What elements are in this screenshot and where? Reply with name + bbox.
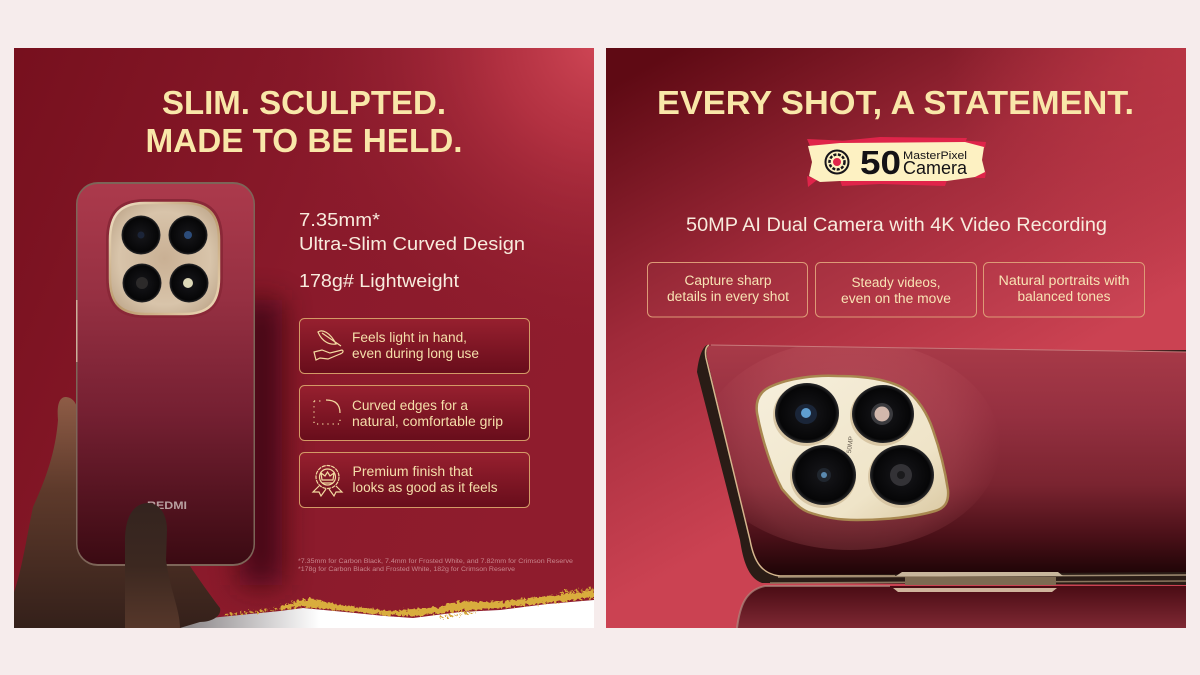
camera bump engraving: 50MP [846, 436, 855, 454]
feature text: Curved edges for a [352, 398, 468, 413]
thumb over phone [125, 503, 180, 628]
feature box: light in hand [300, 318, 530, 374]
icon: curved corner [314, 400, 340, 424]
50 MasterPixel Camera label [861, 150, 967, 174]
panel: camera [606, 48, 1186, 628]
feature text [667, 273, 789, 304]
brand logo: REDMI [147, 500, 187, 512]
panel: slim and sculpted design [14, 48, 594, 628]
phone close-up [697, 340, 1186, 592]
lens bottom left [122, 264, 162, 302]
feature box: curved edges [300, 386, 530, 440]
camera badge [807, 137, 986, 187]
lens top right [168, 216, 208, 254]
feature text: even during long use [352, 346, 479, 361]
footnotes [298, 558, 573, 573]
50 MasterPixel Camera label: 50 [860, 144, 901, 181]
title [148, 90, 460, 152]
footnotes: *7.35mm for Carbon Black, 7.4mm for Frosted White, and 7.82mm for Crimson Reserve [298, 558, 573, 565]
specs text: 178g# Lightweight [299, 270, 459, 291]
specs text [299, 209, 525, 291]
lens top right [850, 385, 914, 446]
phone reflection [737, 586, 1186, 628]
lens bottom left [790, 445, 856, 508]
lens bottom right [868, 445, 934, 508]
feature text: looks as good as it feels [352, 480, 498, 495]
lens top left [122, 216, 160, 254]
specs text: 7.35mm* [299, 209, 380, 230]
feature box: steady videos [816, 262, 976, 317]
lens top left [773, 383, 839, 446]
feature text: Capture sharp [684, 273, 772, 288]
phone side rail and buttons [770, 572, 1186, 592]
50 MasterPixel Camera label: Camera [903, 158, 968, 178]
feature text [352, 464, 498, 495]
camera bump [110, 203, 219, 314]
icon: feather over hand [314, 331, 343, 360]
feature text: details in every shot [667, 289, 789, 304]
subtitle: 50MP AI Dual Camera with 4K Video Recording [686, 215, 1107, 236]
lens bottom right flash [170, 264, 208, 302]
feature text: Feels light in hand, [352, 330, 467, 345]
50 MasterPixel Camera label: MasterPixel [903, 150, 967, 162]
specs text: Ultra-Slim Curved Design [299, 233, 525, 254]
feature box: premium finish [300, 452, 530, 508]
title: SLIM. SCULPTED. [162, 84, 446, 121]
feature text [352, 330, 479, 361]
icon: camera aperture [826, 150, 848, 174]
feature text: Natural portraits with [998, 273, 1130, 288]
feature text: balanced tones [1018, 289, 1111, 304]
feature text: Premium finish that [352, 464, 473, 479]
feature text: even on the move [841, 291, 951, 306]
title: EVERY SHOT, A STATEMENT. [657, 84, 1134, 121]
title: MADE TO BE HELD. [146, 122, 462, 159]
feature text: natural, comfortable grip [352, 414, 503, 429]
panel background [14, 48, 594, 628]
feature text [842, 277, 950, 303]
feature box: sharp details [648, 262, 808, 317]
camera bump [757, 376, 948, 520]
torn white and gold paper edge [180, 589, 594, 628]
icon: premium badge [313, 466, 342, 496]
feature box: natural portraits [984, 262, 1144, 317]
hand behind phone [14, 397, 220, 628]
feature text [1000, 275, 1129, 301]
feature text: Steady videos, [852, 275, 940, 290]
phone back [76, 182, 255, 566]
feature text [352, 398, 503, 429]
panel background [606, 48, 1186, 628]
footnotes: *178g for Carbon Black and Frosted White, 182g for Crimson Reserve [298, 566, 515, 573]
